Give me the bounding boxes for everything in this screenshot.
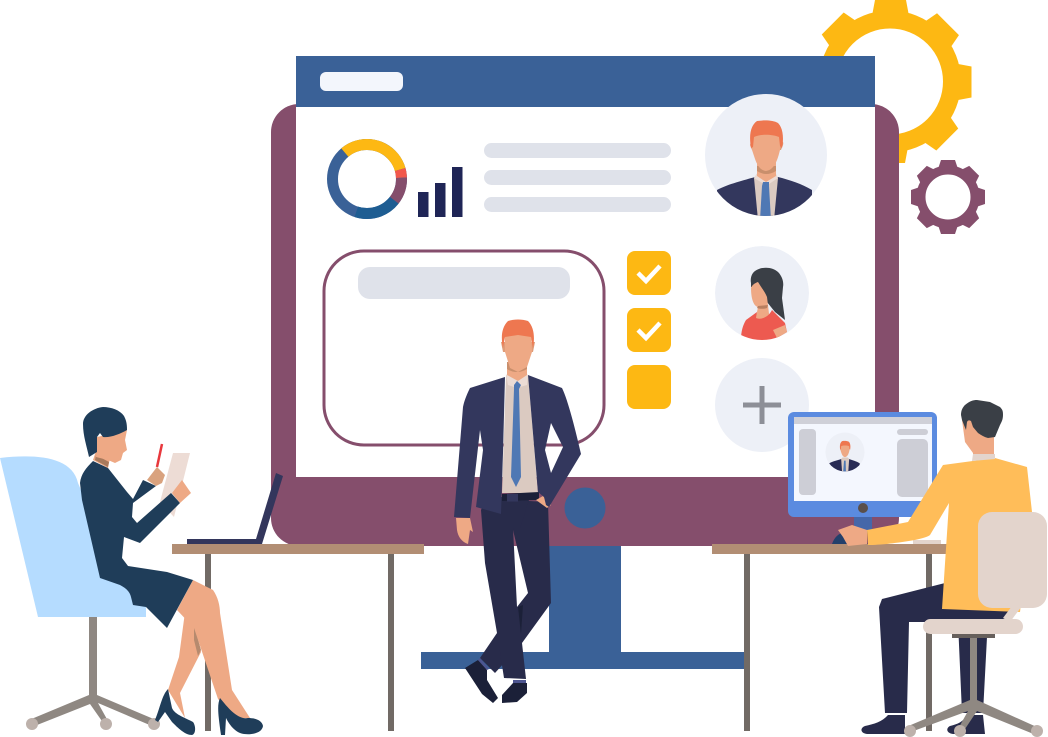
office chair: right (904, 512, 1047, 737)
pants (879, 583, 1013, 713)
ears (501, 342, 535, 352)
monitor power button (564, 488, 606, 528)
hair (502, 320, 534, 348)
hand: left (456, 518, 473, 544)
person: standing man (454, 320, 581, 703)
hand: holding paper (172, 480, 191, 503)
sock: right (513, 680, 526, 683)
front leg (177, 580, 250, 718)
tie (511, 381, 521, 487)
pants: shadow (518, 605, 523, 634)
hand: pocket (536, 496, 551, 508)
office chair: left (0, 456, 160, 730)
jacket: right (528, 375, 581, 507)
donut chart (318, 130, 416, 228)
neck shadow (95, 455, 109, 467)
text placeholder lines (484, 143, 671, 212)
monitor screen (296, 107, 875, 477)
shoe: left (861, 715, 905, 734)
back leg (168, 612, 201, 718)
neck shadow (507, 362, 527, 372)
sweater (867, 458, 1032, 612)
sock: left (478, 658, 489, 670)
hair (83, 407, 127, 457)
hand (838, 525, 867, 546)
mouse (832, 533, 868, 544)
face (505, 330, 532, 372)
small desktop monitor (788, 412, 937, 533)
checkbox list (627, 251, 671, 409)
collar (972, 454, 995, 461)
shoe: right (947, 715, 985, 734)
left desk (172, 544, 424, 731)
avatar: woman (715, 246, 809, 345)
shirt (502, 375, 538, 493)
hand: writing (147, 467, 165, 486)
person: seated man (838, 400, 1032, 734)
dress (80, 461, 193, 628)
mini avatar (829, 440, 860, 472)
person: seated woman (80, 407, 263, 735)
buckle (507, 494, 518, 502)
paper on desk (913, 540, 941, 544)
collar (506, 372, 528, 387)
paper (160, 453, 190, 517)
neck (93, 448, 110, 468)
face (96, 430, 127, 463)
leg shadow (194, 625, 201, 656)
pants: back leg (480, 500, 551, 673)
hair (961, 400, 1003, 438)
window header bar (296, 56, 875, 107)
shoe: back (155, 689, 195, 735)
monitor body (271, 104, 899, 546)
panel: content card (324, 251, 604, 445)
belt (502, 492, 539, 501)
pencil (157, 444, 162, 467)
avatar: man (705, 94, 827, 220)
bar chart (418, 167, 462, 217)
jacket: left (454, 377, 505, 518)
laptop (187, 473, 283, 544)
shoe: left (465, 660, 498, 703)
icon: small purple gear (911, 160, 985, 234)
neck (507, 362, 527, 381)
neck and head (962, 415, 994, 457)
shoe: front (218, 698, 263, 735)
icon: add user plus (715, 358, 809, 452)
shoe: right (502, 683, 527, 703)
icon: large yellow gear (808, 0, 972, 163)
pants: front leg (481, 497, 530, 679)
monitor stand (421, 545, 745, 669)
right desk (712, 544, 948, 731)
